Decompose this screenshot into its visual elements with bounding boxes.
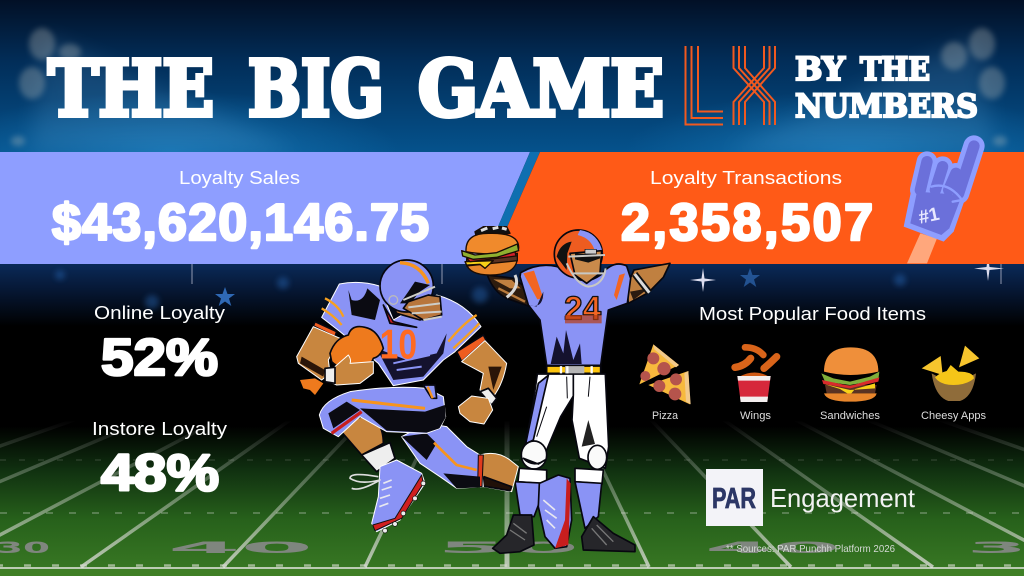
player 10 arms [297,327,507,424]
icon: wings bucket [735,347,777,402]
illustration: player 10 running with wing [297,260,572,548]
stat: instore loyalty [92,419,227,502]
panel: loyalty sales: Loyalty Sales [179,168,300,188]
title: The Big Game: GAME [418,44,664,134]
icon: pizza [639,344,691,404]
panel: loyalty transactions: Loyalty Transactions [650,168,842,188]
lower background: stadium and football field: 3 [967,538,1024,557]
stat: online loyalty: 52% [101,329,218,387]
player 10 wing [300,327,383,395]
lower background: stadium and football field: 40 [168,538,313,557]
lower background: stadium and football field [0,256,1024,576]
subtitle: By the Numbers: BY [795,50,846,88]
icon: cheesy apps [922,346,979,401]
icon: foam finger [904,146,974,263]
logo: PAR Engagement [706,469,916,526]
food item labels: Pizza [652,410,679,422]
title: The Big Game: THE [48,44,214,134]
player 24 belt [547,366,601,373]
panel: loyalty sales: $43,620,146.75 [52,194,429,252]
food item labels: Sandwiches [820,410,880,422]
header background [0,0,1024,152]
icon: sandwich burger [821,347,879,402]
LX roman numeral logo [686,46,775,125]
player 10 jersey [313,282,486,386]
subtitle: By the Numbers [795,50,978,125]
food item labels [652,410,986,422]
diagonal divider [482,152,540,264]
player 10 rear leg [402,423,572,548]
stat: instore loyalty: 48% [101,444,219,502]
title: The Big Game: BIG [248,44,384,134]
source note: ** Sources: PAR Punchh Platform 2026 [726,543,895,555]
stat: online loyalty: Online Loyalty [94,303,225,323]
lower background: stadium and football field: 40 [705,538,840,557]
food item labels: Cheesy Apps [921,410,986,422]
player 24 arms [487,263,670,306]
logo: PAR Engagement: Engagement [770,483,916,513]
panel: loyalty sales [0,152,530,264]
heading: most popular food items: Most Popular Food Items [699,304,926,324]
stat: online loyalty [94,303,225,387]
logo: PAR Engagement: PAR [712,483,756,515]
player 24 jersey [520,264,631,365]
illustration: burger held by player 24 [462,227,519,275]
player 24 helmet [554,230,606,287]
title: The Big Game [48,44,664,134]
illustration: player 24 holding burger [487,230,670,553]
lower background: stadium and football field: 50 [437,538,579,557]
player 10 jersey: 10 [380,320,417,367]
icon: foam finger: #1 [916,203,941,228]
player 10 shin and shoe [340,416,426,533]
stat: instore loyalty: Instore Loyalty [92,419,227,439]
player 24 pants [493,374,635,553]
subtitle: By the Numbers: THE [860,50,930,88]
subtitle: By the Numbers: NUMBERS [795,87,978,125]
panel: loyalty transactions: 2,358,507 [621,194,873,252]
player 10 thigh [319,385,446,437]
player 10 helmet [380,260,442,327]
food item labels: Wings [740,410,772,422]
panel: loyalty transactions [491,152,1024,264]
player 24 jersey: 24 [564,290,602,327]
